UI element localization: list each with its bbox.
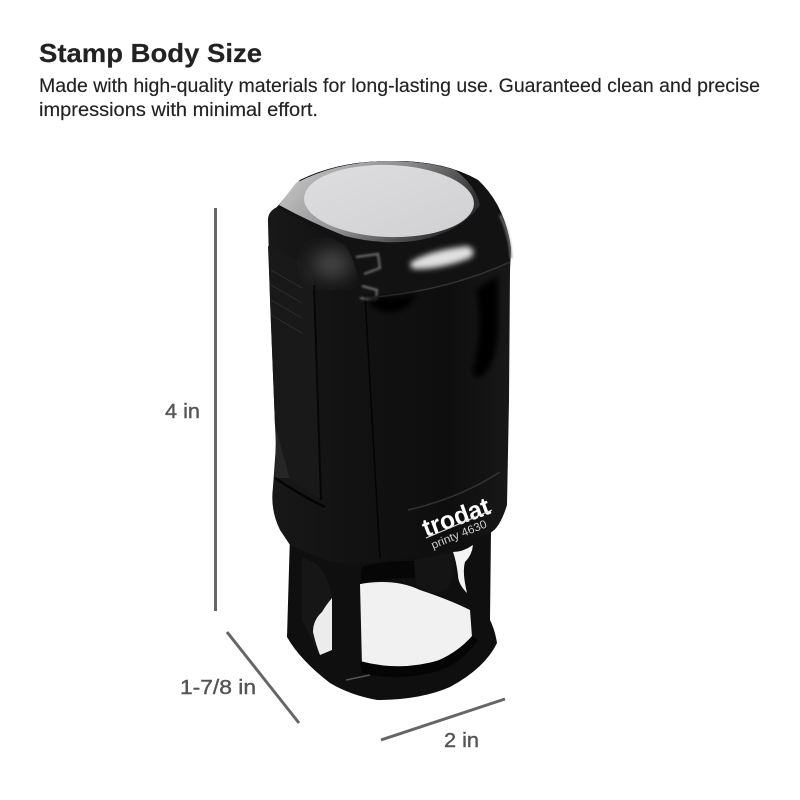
- cap highlight: [410, 246, 474, 269]
- description text: Made with high-quality materials for long-lasting use. Guaranteed clean and precise: [39, 75, 760, 97]
- width dimension: [381, 699, 505, 752]
- stamp base and legs: [287, 530, 497, 700]
- lens: [303, 162, 475, 240]
- depth dimension: 1-7/8 in: [180, 677, 256, 699]
- depth dimension: [180, 632, 299, 723]
- brand logo: trodat: [418, 492, 494, 543]
- clear corner: [356, 254, 380, 300]
- base opening: [360, 582, 472, 669]
- brand logo: printy 4630: [430, 519, 489, 552]
- stamp illustration: [268, 161, 511, 700]
- height dimension: 4 in: [165, 401, 200, 423]
- left opening: [313, 598, 332, 655]
- shoulder highlight: [312, 251, 352, 277]
- width dimension: 2 in: [444, 730, 479, 752]
- left window: [302, 557, 332, 656]
- right rim edge: [500, 215, 511, 258]
- description text: [39, 75, 760, 121]
- stamp main body: [268, 161, 511, 565]
- clear rim top: [279, 161, 480, 242]
- side wheel: [275, 428, 292, 478]
- cap rim: [277, 161, 511, 295]
- bottom body ridge: [408, 472, 500, 510]
- dark reflections: [472, 276, 498, 378]
- side panel: [268, 246, 322, 500]
- inner mechanism: [414, 553, 454, 592]
- description text: impressions with minimal effort.: [39, 99, 318, 121]
- rear opening: [453, 545, 473, 593]
- title: Stamp Body Size: [39, 38, 262, 68]
